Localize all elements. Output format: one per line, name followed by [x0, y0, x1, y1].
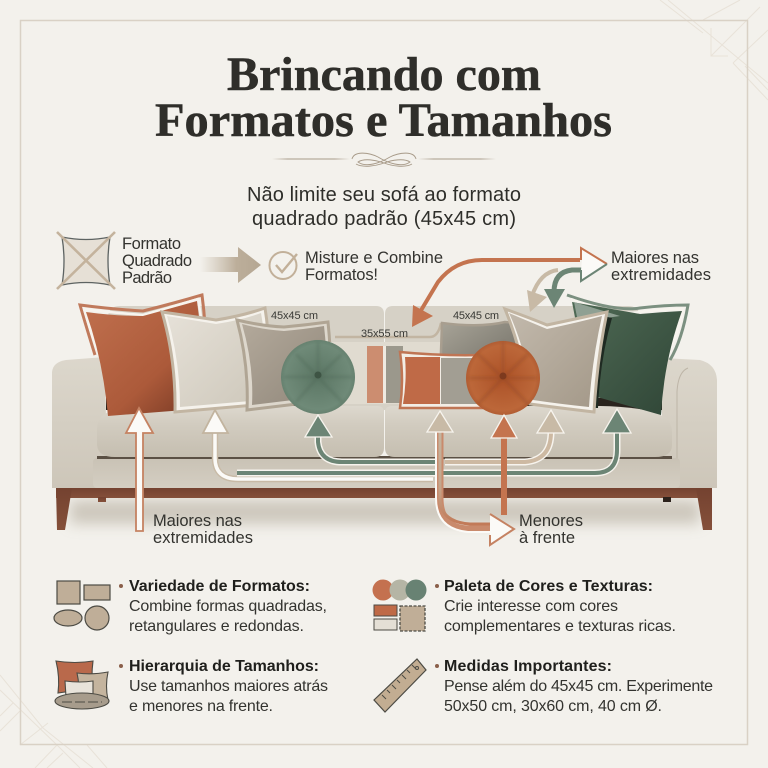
right arm — [662, 358, 717, 488]
text: variedade de formatos: Combine formas quadradas, — [129, 598, 327, 615]
label: maiores nas extremidades top: Maiores nas — [611, 249, 699, 267]
icon: colour palette and textures — [372, 580, 426, 631]
arrow: tan route to beige pillow — [445, 410, 564, 462]
arrow: tan to terracotta route to smaller front — [427, 411, 514, 545]
text: hierarquia de tamanhos: Use tamanhos maiores atrás — [129, 678, 328, 695]
text: hierarquia de tamanhos — [119, 658, 328, 715]
text: medidas importantes — [435, 658, 713, 715]
label: misture e combine: Formatos! — [305, 266, 378, 284]
arrow: long sage route to right green pillow — [237, 409, 631, 473]
label: maiores nas extremidades bottom: Maiores nas — [153, 512, 242, 530]
label: formato quadrado padrão: Quadrado — [122, 252, 192, 270]
text: hierarquia de tamanhos: e menores na frente. — [129, 698, 273, 715]
text: variedade de formatos: retangulares e redondas. — [129, 618, 304, 635]
text: medidas importantes: 50x50 cm, 30x60 cm, 40 cm Ø. — [444, 698, 662, 715]
ornamental divider — [272, 153, 496, 166]
arrow: gradient pointing to mix — [200, 247, 261, 283]
subtitle — [247, 184, 521, 230]
pillow: gray back right — [440, 322, 526, 380]
arrow: sage route to round green pillow — [305, 415, 438, 462]
pillow: textured beige — [505, 309, 607, 412]
label: maiores nas extremidades top: extremidades — [611, 266, 711, 284]
label: misture e combine: Misture e Combine — [305, 249, 443, 267]
pillow: large orange left — [80, 295, 210, 416]
pillow: round sage green — [281, 340, 355, 414]
label: menores à frente — [519, 512, 583, 547]
arrow: terracotta to left pillows — [412, 260, 580, 327]
pillow: cream — [162, 308, 269, 412]
text: medidas importantes: Pense além do 45x45 cm. Experimente — [444, 678, 713, 695]
base — [93, 458, 680, 488]
label: menores à frente: à frente — [519, 529, 575, 547]
sofa back — [108, 306, 640, 420]
arrowhead: double white head — [581, 248, 607, 281]
arrow: green curved down — [544, 270, 582, 308]
title: Formatos e Tamanhos — [155, 94, 612, 147]
sofa — [52, 306, 717, 530]
icon: size hierarchy pillows — [55, 661, 109, 709]
text: paleta de cores e texturas — [435, 578, 676, 635]
icon: crossed-out square pillow — [57, 232, 115, 289]
label: formato quadrado padrão — [122, 235, 192, 287]
subtitle: Não limite seu sofá ao formato — [247, 184, 521, 206]
text: medidas importantes: Medidas Importantes: — [444, 658, 612, 675]
title: Brincando com — [227, 48, 541, 101]
text: paleta de cores e texturas: Crie interesse com cores — [444, 598, 618, 615]
label: maiores nas extremidades bottom — [153, 512, 253, 547]
label: formato quadrado padrão: Formato — [122, 235, 181, 253]
label: 45x45 cm left: 45x45 cm — [271, 310, 318, 322]
arrow: left terracotta up — [126, 408, 153, 531]
label: maiores nas extremidades bottom: extremidades — [153, 529, 253, 547]
label: misture e combine — [305, 249, 443, 284]
label: maiores nas extremidades top — [611, 249, 711, 284]
seat cushions — [97, 406, 384, 457]
icon: shapes variety — [54, 581, 110, 630]
pillow: round terracotta — [466, 341, 540, 415]
icon: check mark — [270, 252, 297, 279]
pillow: taupe — [237, 320, 331, 410]
label: 45x45 cm right: 45x45 cm — [453, 310, 499, 322]
arrow: tan white route to cream pillow — [203, 410, 433, 479]
wood rail and legs — [56, 488, 712, 530]
left arm — [52, 357, 107, 488]
pillow: dark green right — [567, 295, 688, 415]
arrow: tan curved down — [527, 270, 558, 312]
text: variedade de formatos: Variedade de Formatos: — [129, 578, 310, 595]
label: menores à frente: Menores — [519, 512, 583, 530]
label: formato quadrado padrão: Padrão — [122, 269, 172, 287]
text: paleta de cores e texturas: Paleta de Cores e Texturas: — [444, 578, 653, 595]
title — [155, 48, 612, 147]
pillow: orange and gray lumbar — [400, 352, 482, 408]
icon: ruler — [374, 659, 426, 712]
floor shadow — [70, 500, 700, 524]
text: hierarquia de tamanhos: Hierarquia de Tamanhos: — [129, 658, 319, 675]
label: 35x55 cm: 35x55 cm — [361, 328, 408, 340]
pillow: striped lumbar — [328, 323, 442, 404]
arrow: terracotta straight up — [491, 415, 517, 515]
text: paleta de cores e texturas: complementares e texturas ricas. — [444, 618, 676, 635]
text: variedade de formatos — [119, 578, 327, 635]
subtitle: quadrado padrão (45x45 cm) — [252, 208, 516, 230]
